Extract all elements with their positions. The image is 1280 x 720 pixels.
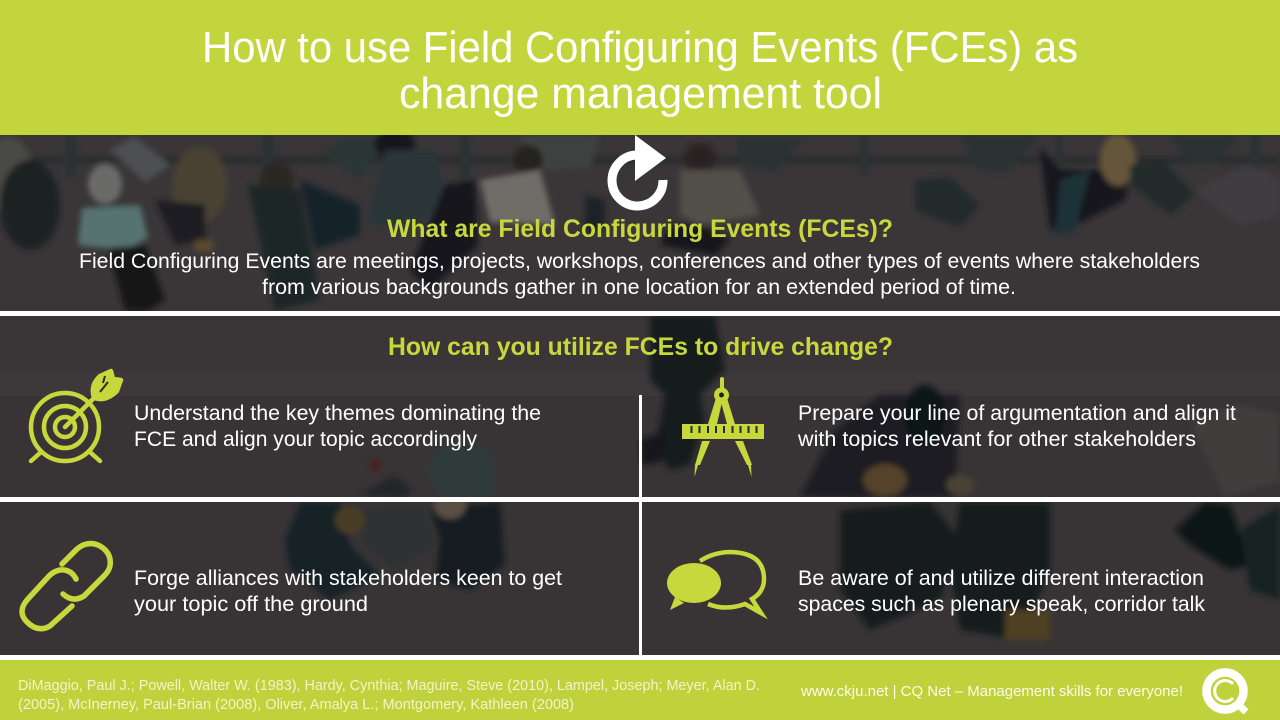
text: interaction spaces: spaces such as plenary speak, corridor talk	[798, 593, 1205, 616]
text: interaction spaces: Be aware of and utilize different interaction	[798, 567, 1204, 590]
title: How to use Field Configuring Events (FCEs) as	[202, 23, 1078, 72]
text: interaction spaces	[798, 567, 1205, 616]
panel: prepare line of argumentation	[682, 377, 1236, 477]
text: forge alliances	[134, 567, 562, 616]
definition text: from various backgrounds gather in one location for an extended period of time.	[262, 276, 1016, 299]
text: understand key themes: FCE and align your topic accordingly	[134, 428, 477, 451]
text: prepare argumentation: Prepare your line of argumentation and align it	[798, 402, 1236, 425]
references: DiMaggio, Paul J.; Powell, Walter W. (1983), Hardy, Cynthia; Maguire, Steve (2010), Lampel, Joseph; Meyer, Alan D.	[18, 678, 760, 694]
title	[202, 23, 1078, 118]
header band	[0, 0, 1280, 135]
icon: CQ logo	[1206, 672, 1246, 712]
icon: chain link	[22, 544, 110, 629]
heading: what are FCEs: What are Field Configuring Events (FCEs)?	[387, 215, 893, 243]
icon: target with arrow	[31, 371, 121, 461]
text: understand key themes	[134, 402, 541, 451]
icon: speech bubbles	[667, 552, 764, 613]
panel: interaction spaces	[667, 552, 1205, 616]
text: forge alliances: your topic off the ground	[134, 593, 368, 616]
references: (2005), McInerney, Paul-Brian (2008), Oliver, Amalya L.; Montgomery, Kathleen (2008)	[18, 697, 574, 713]
website and tagline: www.ckju.net | CQ Net – Management skills for everyone!	[800, 684, 1183, 700]
panel: understand key themes	[31, 371, 541, 461]
panel: forge alliances	[22, 544, 562, 629]
icon: compass and ruler	[682, 377, 764, 477]
definition text	[79, 250, 1200, 299]
text: forge alliances: Forge alliances with stakeholders keen to get	[134, 567, 562, 590]
dividers	[0, 311, 1280, 660]
definition text: Field Configuring Events are meetings, projects, workshops, conferences and other types of events where stakeholders	[79, 250, 1200, 273]
icon: circular arrow	[612, 135, 666, 206]
background photo of event attendees	[0, 129, 1280, 660]
references	[18, 678, 760, 713]
title: change management tool	[399, 69, 882, 118]
text: prepare argumentation	[797, 402, 1236, 451]
text: understand key themes: Understand the key themes dominating the	[134, 402, 541, 425]
text: prepare argumentation: with topics relevant for other stakeholders	[797, 428, 1196, 451]
footer band	[0, 660, 1280, 720]
heading: how to utilize FCEs: How can you utilize FCEs to drive change?	[388, 333, 893, 361]
